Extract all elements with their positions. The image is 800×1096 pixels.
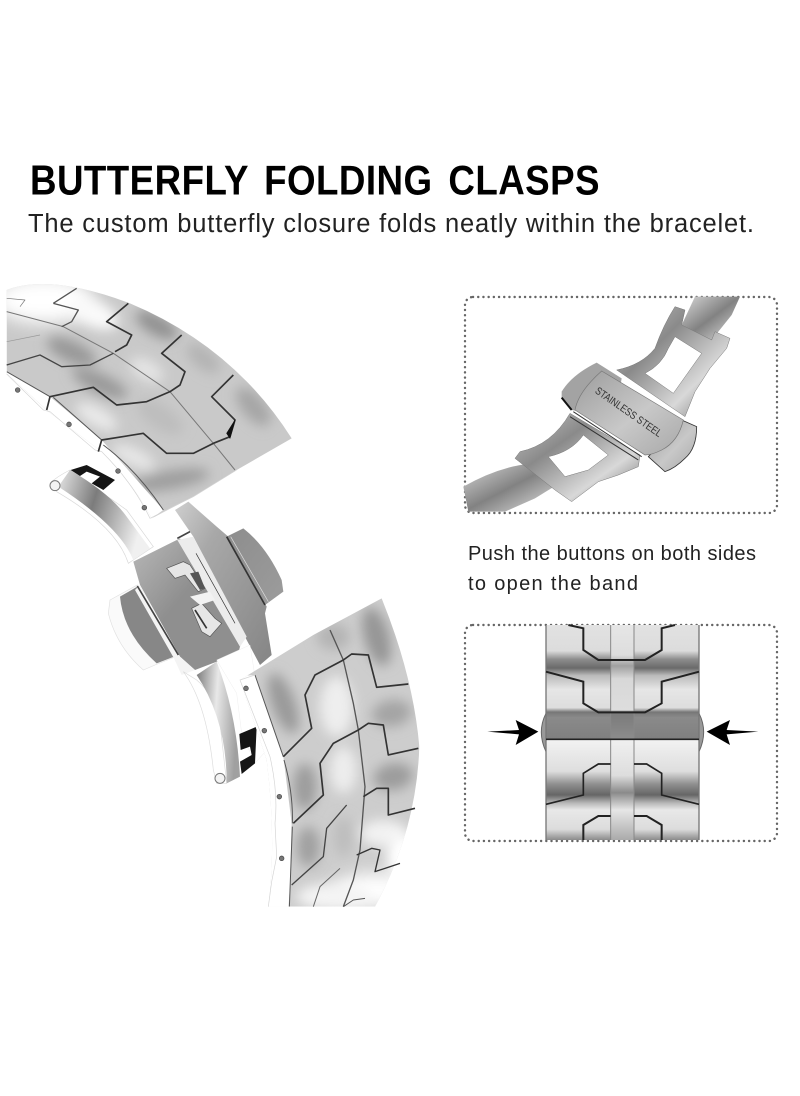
link grooves [7, 288, 235, 470]
lower arm outer white [183, 672, 227, 783]
left button [562, 363, 622, 418]
upper clasp arm steel [58, 470, 150, 560]
engraved text: STAINLESS STEEL [593, 385, 664, 440]
lower clasp arm and band [183, 593, 433, 910]
upper bracelet band [6, 284, 292, 519]
metal links with shading [6, 284, 292, 518]
instruction text [468, 543, 756, 595]
panel: straight band with arrows [465, 625, 777, 841]
strip outline [7, 374, 237, 518]
white seam [135, 585, 195, 675]
band body [546, 625, 699, 840]
cover plate [575, 371, 683, 455]
left button rim [108, 585, 180, 670]
panel: folded clasp [463, 297, 777, 513]
instruction text: Push the buttons on both sides [468, 543, 756, 565]
lower pin [215, 773, 225, 783]
band edges and centre lines [546, 625, 699, 840]
lower rivets [244, 686, 284, 861]
white side strip [7, 372, 163, 518]
white tab [217, 645, 267, 763]
centre plate [133, 538, 240, 670]
lower arm steel [197, 662, 240, 783]
dotted frame [465, 625, 777, 841]
instruction text: to open the band [468, 573, 638, 595]
right arrow [707, 720, 758, 745]
upper clasp arm white edge [50, 470, 153, 563]
right button [648, 420, 697, 472]
clasp pin [50, 481, 60, 491]
rivets [15, 388, 147, 510]
bottom strap [463, 463, 557, 512]
title: BUTTERFLY FOLDING CLASPS [30, 156, 600, 204]
left button [120, 587, 178, 663]
dotted frame [465, 297, 777, 513]
clasp centre [108, 502, 283, 675]
link outlines [546, 625, 699, 840]
lower slot [239, 727, 257, 774]
bottom frame [515, 413, 640, 502]
upper clasp arm slot [71, 465, 115, 490]
left arrow [487, 720, 538, 745]
white side strip [240, 675, 292, 906]
side buttons [541, 713, 704, 752]
hinge details [167, 562, 222, 637]
white strip [177, 537, 247, 647]
butterfly clasp [50, 465, 153, 563]
lower bracelet band [240, 598, 420, 908]
seam [570, 412, 642, 460]
strip outline [240, 675, 277, 907]
top strap [682, 297, 740, 340]
lower band grooves [283, 630, 418, 907]
subtitle: The custom butterfly closure folds neatly within the bracelet. [28, 210, 754, 238]
inner edge [7, 372, 163, 510]
right button [227, 528, 283, 605]
upper right arm [175, 502, 272, 665]
top frame [617, 307, 730, 417]
